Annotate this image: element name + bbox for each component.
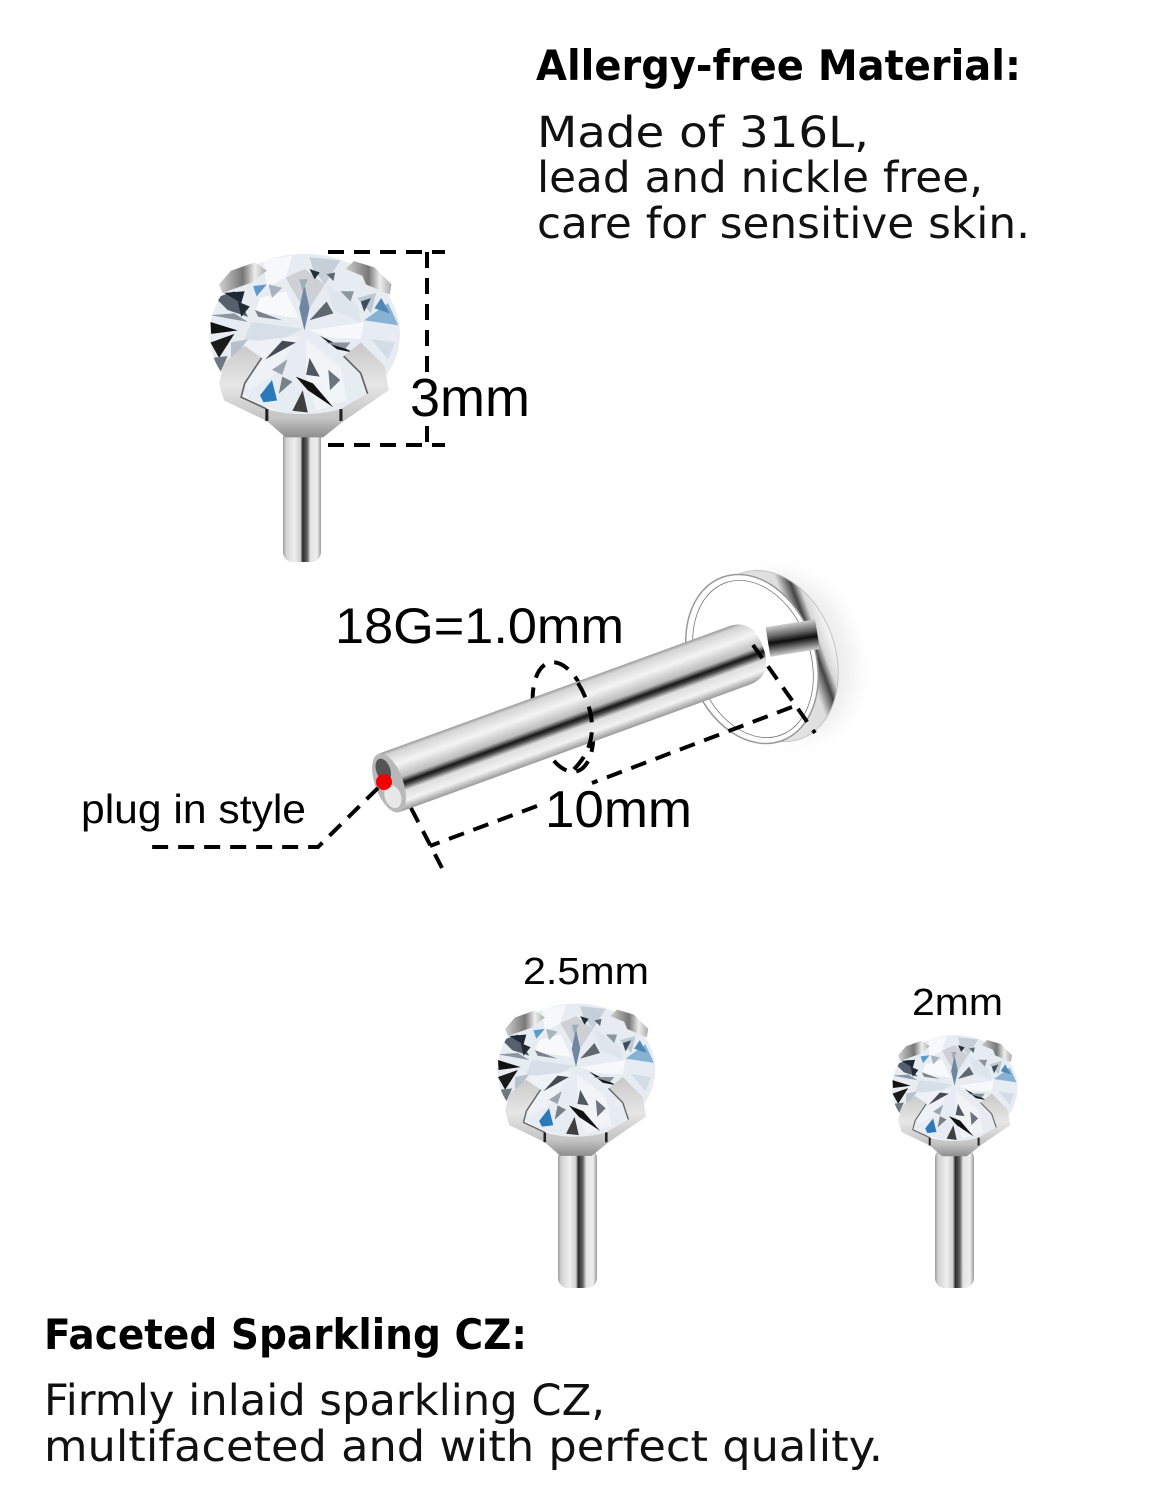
dimension: 3mm bracket	[328, 252, 530, 445]
text block: cz description: multifaceted and with perfect quality.	[44, 1422, 883, 1472]
stud: 3mm gem	[209, 254, 400, 562]
stud: 2mm gem: 2mm	[912, 982, 1003, 1024]
dimension: 3mm bracket: 3mm	[410, 368, 530, 428]
dimension: 10mm length: 10mm	[545, 781, 692, 839]
text block: cz description	[44, 1376, 883, 1472]
heading: faceted sparkling cz: Faceted Sparkling CZ:	[44, 1310, 527, 1359]
labret bar with flat back disc	[365, 551, 876, 817]
dimension: 10mm length	[411, 645, 815, 868]
callout: plug in style	[81, 774, 392, 847]
text block: material description: Made of 316L,	[537, 108, 869, 158]
text block: material description: lead and nickle free,	[537, 153, 983, 203]
stud: 2.5mm gem: 2.5mm	[523, 951, 649, 993]
text block: material description: care for sensitive skin.	[537, 199, 1030, 249]
gauge ring, back half	[522, 656, 604, 778]
text block: cz description: Firmly inlaid sparkling CZ,	[44, 1376, 605, 1426]
label: gauge: 18G=1.0mm	[335, 598, 624, 654]
callout: plug in style: plug in style	[81, 786, 306, 832]
text block: material description	[537, 108, 1030, 249]
stud: 2mm gem	[892, 982, 1018, 1288]
stud: 2.5mm gem	[497, 951, 655, 1288]
gauge ring, front half	[572, 683, 592, 771]
heading: allergy-free material: Allergy-free Material:	[536, 41, 1021, 90]
